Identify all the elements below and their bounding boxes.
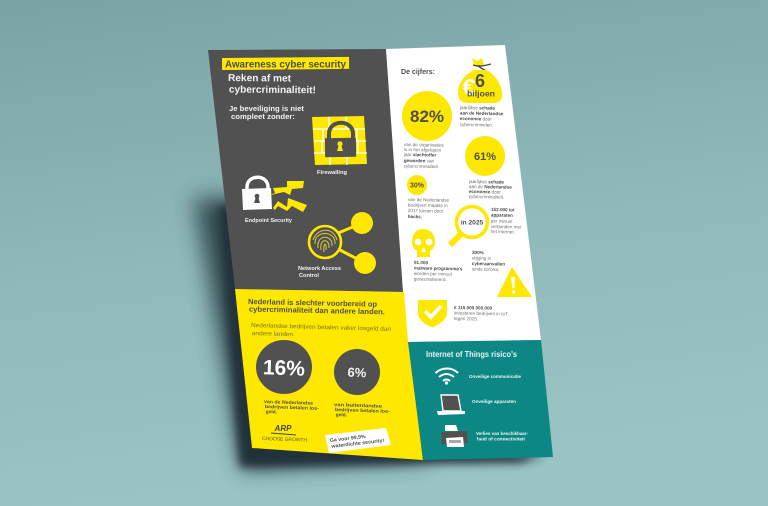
text: 6% caption bbox=[334, 402, 391, 420]
icon: network fingerprint bbox=[309, 212, 376, 274]
label: firewalling: Firewalling bbox=[317, 170, 347, 176]
icon: warning triangle bbox=[497, 267, 532, 297]
text: 152.000: 152.000 iot bbox=[491, 207, 515, 212]
stat: 61%: 61% bbox=[474, 151, 496, 163]
text: 30% caption: 2017 kosten door bbox=[408, 208, 444, 214]
text: 152.000: per minuut bbox=[491, 218, 513, 224]
text: 16% caption: geld. bbox=[266, 409, 277, 415]
text: 16% caption bbox=[264, 399, 320, 417]
callout: waterdichte security: Ga voor 99,9% bbox=[330, 434, 367, 444]
text: bag caption: jaarlijkse schade bbox=[459, 105, 495, 111]
text: 61% caption: cybercriminaliteit. bbox=[469, 194, 504, 200]
callout: waterdichte security bbox=[325, 428, 391, 453]
text: bag caption: economie door bbox=[460, 116, 492, 122]
stat: 16%: 16% bbox=[263, 356, 306, 381]
text: intro bbox=[251, 323, 391, 341]
text: 82% caption bbox=[403, 142, 445, 169]
icon: printer bbox=[441, 425, 468, 447]
text: bag caption: cybercriminelen. bbox=[460, 122, 493, 128]
heading: reken af: cybercriminaliteit! bbox=[229, 85, 316, 96]
stat: 16% bbox=[256, 340, 312, 394]
stat: 6%: 6% bbox=[347, 365, 367, 380]
title: Awareness cyber security bbox=[225, 60, 346, 70]
icon: money bag bbox=[458, 58, 502, 103]
text: 16% caption: van de Nederlandse bbox=[264, 399, 313, 407]
text: 61% caption: aan de Nederlandse bbox=[469, 184, 512, 190]
icon: money bag: 6 bbox=[475, 71, 485, 91]
label: verlies van beschikbaarheid: heid of connectiviteit bbox=[477, 436, 525, 442]
text: 300%: 300% bbox=[472, 250, 484, 255]
icon: shield check bbox=[418, 300, 447, 328]
heading: nederland: cybercriminaliteit dan andere landen. bbox=[249, 305, 385, 316]
heading: reken af: Reken af met bbox=[228, 73, 292, 85]
text: 82% caption: cybercriminaliteit. bbox=[404, 163, 439, 169]
text: 30% caption: hacks. bbox=[408, 214, 422, 219]
text: 82% caption: geworden van bbox=[404, 158, 435, 164]
text: intro: andere landen. bbox=[252, 331, 295, 338]
panel: teal iot risks bbox=[408, 340, 553, 460]
stat: 82% bbox=[402, 91, 452, 141]
icon: wifi bbox=[436, 368, 458, 385]
heading: iot: Internet of Things risico's bbox=[426, 350, 518, 359]
label: endpoint security: Endpoint Security bbox=[245, 218, 293, 224]
heading: nederland: Nederland is slechter voorbereid op bbox=[248, 297, 377, 309]
text: 82% caption: van de organisaties bbox=[404, 142, 445, 148]
stat: 30%: 30% bbox=[410, 182, 425, 190]
heading: reken af bbox=[228, 73, 316, 96]
text: 30% caption bbox=[408, 197, 450, 220]
logo: arp choose growth: CHOOSE GROWTH bbox=[262, 436, 307, 444]
text: 6% caption: geld. bbox=[336, 412, 347, 418]
poster bbox=[208, 45, 553, 460]
text: 30% caption: bedrijven maakte in bbox=[408, 202, 448, 208]
icon: money bag: € bbox=[463, 74, 476, 100]
label: network access control bbox=[298, 266, 341, 279]
subheading bbox=[229, 104, 305, 121]
text: 61% caption bbox=[468, 179, 512, 200]
text: 82% caption: is in het afgelopen bbox=[404, 147, 442, 153]
panel: yellow comparison bbox=[235, 289, 423, 460]
text: 115 miljard: € 115.000.000.000 bbox=[454, 305, 493, 311]
text: 91.000: malware programma's bbox=[414, 265, 463, 271]
text: 91.000 bbox=[414, 260, 463, 282]
stat: 30% bbox=[407, 175, 427, 195]
text: 152.000: apparaten bbox=[491, 212, 513, 218]
text: 152.000: het internet. bbox=[491, 229, 515, 234]
logo: arp choose growth bbox=[262, 424, 307, 444]
text: 91.000: 91.000 bbox=[414, 260, 429, 265]
callout: waterdichte security: waterdichte security! bbox=[330, 438, 385, 450]
text: bag caption: aan de Nederlandse bbox=[460, 110, 504, 116]
icon: laptop bbox=[437, 395, 465, 415]
label: network access control: Network Access bbox=[298, 266, 341, 272]
stat: 82%: 82% bbox=[410, 107, 444, 126]
icon: skull bbox=[412, 229, 435, 257]
text: 61% caption: economie door bbox=[469, 189, 501, 195]
icon: endpoint lock with lightning bbox=[242, 177, 307, 212]
text: 115 miljard bbox=[454, 305, 508, 322]
label: network access control: Control bbox=[299, 273, 319, 279]
text: 6% caption: bedrijven betalen los- bbox=[335, 407, 390, 415]
stat: 6% bbox=[334, 349, 380, 395]
label: onveilige apparaten: Onveilige apparaten bbox=[472, 399, 516, 405]
text: bag caption bbox=[459, 105, 504, 128]
text: 152.000 bbox=[491, 207, 522, 235]
text: 6% caption: van buitenlandse bbox=[334, 402, 383, 410]
text: intro: Nederlandse bedrijven betalen vaker losgeld dan bbox=[251, 323, 391, 333]
text: 152.000: verbonden met bbox=[491, 224, 522, 230]
label: verlies van beschikbaarheid: Verlies van beschikbaar- bbox=[476, 431, 528, 437]
icon: money bag: biljoen bbox=[467, 88, 495, 98]
panel: dark security panel bbox=[208, 49, 404, 292]
text: 16% caption: bedrijven betalen los- bbox=[265, 404, 319, 412]
text: 300% bbox=[472, 250, 505, 272]
logo: arp choose growth: ARP bbox=[274, 424, 292, 433]
page shadow bbox=[194, 198, 545, 470]
icon: firewall lock bbox=[312, 116, 367, 165]
icon: magnifier in 2025: in 2025 bbox=[461, 220, 484, 226]
text: 30% caption: van de Nederlandse bbox=[408, 197, 450, 203]
label: verlies van beschikbaarheid bbox=[476, 431, 528, 442]
text: 115 miljard: investeren bedrijven in IoT bbox=[454, 310, 508, 316]
text: 82% caption: jaar slachtoffer bbox=[403, 152, 437, 158]
text: 61% caption: jaarlijkse schade bbox=[468, 179, 504, 185]
subheading: compleet zonder: bbox=[231, 112, 295, 121]
text: 300%: sinds corona. bbox=[472, 266, 499, 272]
heading: nederland bbox=[248, 297, 385, 316]
label: onveilige communicatie: Onveilige communicatie bbox=[469, 374, 521, 380]
text: 300%: stijging in bbox=[472, 255, 492, 261]
heading: de cijfers: De cijfers: bbox=[401, 67, 435, 76]
stat: 61% bbox=[465, 136, 505, 176]
text: 300%: cyberaanvallen bbox=[472, 261, 505, 267]
subheading: Je beveiliging is niet bbox=[229, 104, 305, 113]
text: 91.000: geneutraliseerd. bbox=[414, 276, 447, 282]
text: 91.000: worden per minuut bbox=[414, 271, 453, 277]
icon: magnifier in 2025 bbox=[450, 206, 488, 245]
text: 115 miljard: tegen 2025. bbox=[454, 316, 478, 321]
panel: white figures bbox=[386, 45, 541, 342]
